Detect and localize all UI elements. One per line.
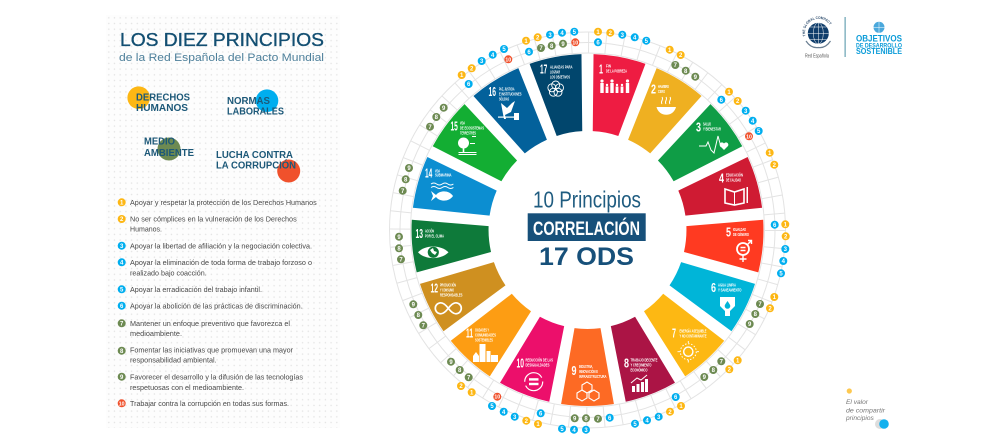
ods 11: CIUDADES Y [475, 328, 489, 332]
icon: book [725, 187, 748, 205]
dots: ods 3 principles: 1 [727, 90, 731, 96]
dots: ods 13 principles: 8 [397, 246, 401, 252]
logo: global compact: Red Española [805, 54, 829, 60]
dots: ods 9 principles [558, 414, 614, 434]
dots: ods 17 principles: 8 [550, 44, 554, 50]
ods 3: Y BIENESTAR [703, 126, 721, 132]
category: normas laborales [227, 89, 284, 118]
category: lucha contra la corrupcion: LA CORRUPCIÓN [216, 159, 296, 172]
ods 4 [675, 156, 764, 229]
dots: ods 7 principles: 2 [728, 367, 732, 373]
dots: ods 11 principles: 9 [449, 360, 453, 366]
dots: ods 12 principles [409, 300, 427, 329]
list: ten principles [118, 198, 317, 408]
dots: ods 5 principles: 5 [779, 271, 783, 277]
list: ten principles: No ser cómplices en la vulneración de los Derechos [130, 215, 297, 224]
dots: ods 9 principles: 9 [573, 416, 577, 422]
dots: ods 5 principles: 2 [784, 234, 788, 240]
dots: ods 17 principles: 3 [548, 33, 552, 39]
ods 15: DE ECOSISTEMAS [460, 126, 484, 130]
ods 11: COMUNIDADES [475, 332, 496, 338]
dots: ods 15 principles: 9 [442, 106, 446, 112]
ods 8: 8 [624, 356, 629, 370]
dots: ods 11 principles: 8 [458, 368, 462, 374]
ods 13: POR EL CLIMA [425, 234, 444, 238]
dots: ods 12 principles: 7 [422, 323, 426, 329]
icon: partnership flower [548, 81, 564, 96]
ods 5 [683, 213, 765, 273]
dots: ods 17 principles: 5 [573, 30, 577, 36]
dots: ods 17 principles: 10 [572, 40, 578, 46]
dots: ods 1 principles: 4 [633, 35, 637, 41]
ods 17: LOS OBJETIVOS [550, 74, 570, 80]
icon: cubes [577, 382, 599, 401]
ods 8 [598, 312, 676, 404]
dots: ods 3 principles: 2 [736, 99, 740, 105]
dots: ods 6 principles: 7 [758, 302, 762, 308]
dots: ods 14 principles [399, 164, 413, 195]
ods 13 [410, 213, 492, 273]
dots: ods 6 principles: 1 [773, 295, 777, 301]
list: ten principles: 3 [120, 244, 124, 250]
heading: panel title: LOS DIEZ PRINCIPIOS [120, 29, 324, 50]
dots: ods 3 principles: 4 [751, 119, 755, 125]
category: derechos humanos [127, 86, 190, 114]
dots: ods 12 principles: 8 [417, 313, 421, 319]
dots: ods 8 principles: 1 [679, 404, 683, 410]
dots: ods 16 principles: 10 [505, 57, 511, 63]
dots: ods 9 principles: 7 [596, 417, 600, 423]
dots: ods 9 principles: 3 [584, 428, 588, 434]
dots: ods 1 principles: 1 [596, 30, 600, 36]
footer note: el valor de compartir principios: El valor [846, 399, 869, 406]
ods 16: 16 [488, 85, 496, 99]
dots: ods 17 principles: 7 [539, 46, 543, 52]
dots: ods 13 principles: 7 [399, 257, 403, 263]
list: ten principles: 8 [120, 349, 124, 355]
dots: ods 7 principles: 7 [720, 359, 724, 365]
ods 10: 10 [516, 356, 524, 370]
dots: ods 3 principles: 3 [744, 109, 748, 115]
icon: infinity [435, 303, 461, 314]
ods 16: PAZ, JUSTICIA [499, 86, 514, 92]
ods 9 [561, 328, 614, 406]
logo: global compact [802, 16, 832, 60]
ods 6: AGUA LIMPIA [718, 282, 736, 288]
dots: ods 1 principles: 6 [596, 40, 600, 46]
category: medio ambiente: AMBIENTE [144, 147, 194, 159]
icon: heartbeat [699, 136, 728, 153]
icon: gender equality [737, 240, 752, 262]
ods 12: 12 [430, 282, 438, 296]
ods 15 [431, 103, 525, 192]
dots: ods 2 principles [666, 46, 699, 81]
dots: ods 11 principles: 1 [470, 390, 474, 396]
list: ten principles: Apoyar la libertad de afiliación y la negociación colectiva. [130, 241, 312, 250]
logo: objetivos de desarrollo sostenible: DE DESARROLLO [856, 43, 902, 50]
dots: ods 14 principles: 7 [401, 189, 405, 195]
dots: ods 16 principles: 1 [460, 73, 464, 79]
ods 16: E INSTITUCIONES [499, 92, 522, 96]
dots: ods 6 principles: 2 [768, 306, 772, 312]
dots: ods 3 principles: 6 [720, 98, 724, 104]
ods 10 [499, 312, 577, 404]
dots: ods 10 principles: 4 [502, 410, 506, 416]
ods 9: 9 [572, 364, 577, 378]
dots: ods 17 principles: 1 [524, 39, 528, 45]
list: ten principles: 7 [120, 321, 124, 327]
dots: ods 10 principles: 6 [539, 411, 543, 417]
ods 3: 3 [696, 120, 701, 134]
dots: ods 10 principles: 1 [536, 422, 540, 428]
icon: dove and gavel [498, 101, 519, 120]
list: ten principles: Mantener un enfoque preventivo que favorezca el [130, 319, 290, 328]
dots: ods 10 principles: 5 [490, 404, 494, 410]
dots: ods 16 principles: 5 [502, 47, 506, 53]
ods 4: 4 [719, 172, 724, 186]
center title [528, 187, 646, 271]
list: ten principles: Apoyar la eliminación de toda forma de trabajo forzoso o [130, 258, 312, 267]
list: ten principles: responsabilidad ambiental. [130, 356, 217, 365]
ods 17: LOGRAR [550, 70, 560, 74]
ods 15: 15 [450, 120, 458, 134]
footer note: el valor de compartir principios: principios [845, 415, 875, 422]
dots: ods 16 principles: 2 [470, 66, 474, 72]
icon: tree [458, 136, 476, 155]
list: ten principles: Humanos. [130, 225, 162, 234]
text: 10 principios: 10 Principios [533, 187, 641, 213]
dots: ods 1 principles: 5 [645, 39, 649, 45]
list: ten principles: Trabajar contra la corrupción en todas sus formas. [130, 399, 289, 408]
ods 12: Y CONSUMO [440, 288, 454, 292]
ods 2: CERO [658, 89, 665, 94]
dots: ods 13 principles [395, 233, 405, 263]
icon: sun [678, 341, 699, 362]
dots: ods 10 principles [488, 393, 545, 428]
dots: ods 17 principles: 2 [536, 35, 540, 41]
ods 13: 13 [416, 227, 423, 241]
ods 12: RESPONSABLES [440, 292, 463, 298]
icon: growth chart [631, 375, 648, 392]
logo: objetivos de desarrollo sostenible [856, 22, 903, 56]
ods 2: 2 [651, 82, 656, 96]
dots: ods 10 principles: 2 [525, 419, 529, 425]
list: ten principles: realizado bajo coacción. [130, 268, 207, 277]
footer note: el valor de compartir principios: de compartir [846, 407, 886, 414]
ods 11 [449, 285, 541, 378]
dots: ods 17 principles: 4 [560, 31, 564, 37]
ods 17: ALIANZAS PARA [550, 64, 572, 70]
dots: ods 9 principles: 5 [560, 427, 564, 433]
list: ten principles: 4 [120, 260, 124, 266]
dots: ods 4 principles: 1 [768, 151, 772, 157]
category: lucha contra la corrupcion [216, 149, 300, 182]
list: ten principles: Apoyar y respetar la protección de los Derechos Humanos [130, 198, 317, 207]
dots: ods 5 principles [771, 220, 790, 277]
ods 3 [650, 103, 744, 192]
logo: global compact: THE GLOBAL COMPACT [802, 16, 832, 37]
list: ten principles: 2 [120, 217, 124, 223]
dots: ods 15 principles: 7 [428, 125, 432, 131]
dots: ods 7 principles: 1 [736, 358, 740, 364]
list: ten principles: 6 [120, 304, 124, 310]
dots: ods 2 principles: 9 [694, 75, 698, 81]
dots: ods 5 principles: 1 [784, 222, 788, 228]
dots: ods 8 principles: 3 [657, 415, 661, 421]
dots: ods 9 principles: 4 [572, 428, 576, 434]
dots: ods 6 principles: 9 [748, 322, 752, 328]
icon: reduced inequalities [525, 373, 543, 391]
dots: ods 7 principles [700, 356, 742, 381]
dots: ods 15 principles [426, 104, 448, 131]
ods 16 [472, 66, 558, 160]
dots: ods 6 principles: 8 [754, 312, 758, 318]
ods 5: IGUALDAD [733, 227, 746, 232]
icon: water [720, 297, 735, 316]
ods 11: SOSTENIBLES [475, 338, 493, 342]
dots: ods 10 principles: 3 [513, 415, 517, 421]
category: medio ambiente [144, 135, 194, 160]
dots: ods 3 principles: 5 [757, 129, 761, 135]
dots: ods 7 principles: 9 [703, 375, 707, 381]
dots: ods 13 principles: 9 [397, 235, 401, 241]
dots: ods 16 principles: 6 [467, 82, 471, 88]
dots: ods 9 principles: 6 [608, 416, 612, 422]
ods 14: VIDA [435, 168, 440, 174]
text: 17 ods: 17 ODS [539, 243, 634, 271]
panel: los diez principios [106, 15, 340, 428]
dots: ods 8 principles: 6 [674, 395, 678, 401]
subheading: de la Red Española del Pacto Mundial [119, 52, 324, 64]
ods 7: Y NO CONTAMINANTE [680, 334, 707, 338]
footer note: el valor de compartir principios [845, 388, 889, 429]
ods 16: SÓLIDAS [499, 96, 509, 102]
dots: ods 5 principles: 4 [782, 259, 786, 265]
dots: ods 17 principles: 6 [527, 50, 531, 56]
list: ten principles: 9 [120, 375, 124, 381]
dots: ods 2 principles: 8 [684, 69, 688, 75]
dots: ods 3 principles: 10 [746, 134, 752, 140]
ods 7: 7 [672, 326, 676, 340]
dots: ods 9 principles: 8 [584, 416, 588, 422]
dots: ods 1 principles: 3 [621, 33, 625, 39]
ods 13: ACCIÓN [425, 228, 434, 234]
dots: ods 2 principles: 1 [668, 48, 672, 54]
list: ten principles: 1 [120, 200, 124, 206]
list: ten principles: Apoyar la abolición de las prácticas de discriminación. [130, 301, 303, 310]
dots: ods 5 principles: 6 [773, 223, 777, 229]
ods 5: DE GÉNERO [733, 232, 749, 237]
list: ten principles: medioambiente. [130, 329, 182, 338]
dots: ods 10 principles: 10 [494, 395, 500, 401]
icon: city [473, 344, 498, 362]
ods 3: SALUD [703, 122, 711, 126]
dots: ods 1 principles [594, 28, 650, 46]
ods 1: FIN [606, 64, 611, 68]
chart grid: outer ring [390, 32, 786, 428]
dots: ods 8 principles: 2 [668, 410, 672, 416]
ods 7: ENERGÍA ASEQUIBLE [680, 328, 707, 334]
dots: ods 17 principles: 9 [561, 42, 565, 48]
ods 9: INDUSTRIA, [579, 364, 593, 369]
ods 14: 14 [425, 166, 432, 180]
dots: ods 16 principles [458, 45, 512, 88]
ods 2 [617, 66, 703, 160]
dots: ods 3 principles [717, 88, 763, 140]
icon: family [600, 79, 629, 93]
ods 1 [580, 52, 646, 138]
dots: ods 8 principles: 5 [633, 422, 637, 428]
list: ten principles: respetuosas con el medioambiente. [130, 383, 244, 392]
icon: bowl [656, 97, 676, 115]
ods 4: EDUCACIÓN [726, 172, 743, 178]
dots: ods 6 principles [746, 293, 778, 328]
ods 14 [411, 156, 500, 229]
ods 10: REDUCCIÓN DE LAS [526, 358, 553, 362]
ods 12: PRODUCCIÓN [440, 282, 456, 288]
ods 2: HAMBRE [658, 84, 669, 89]
dots: ods 11 principles: 7 [467, 375, 471, 381]
dots: ods 14 principles: 9 [407, 166, 411, 172]
dots: ods 11 principles [447, 358, 476, 396]
ods 6: Y SANEAMIENTO [718, 288, 742, 292]
category: normas laborales: LABORALES [227, 106, 284, 118]
dots: ods 16 principles: 3 [480, 59, 484, 65]
ods 15: VIDA [460, 120, 465, 126]
ods 1: 1 [599, 62, 603, 76]
ods 8: ECONÓMICO [630, 368, 648, 372]
ods 4: DE CALIDAD [726, 178, 741, 182]
dots: ods 1 principles: 2 [609, 31, 613, 37]
dots: ods 16 principles: 4 [491, 53, 495, 59]
category: lucha contra la corrupcion: LUCHA CONTRA [216, 149, 293, 161]
category: medio ambiente: MEDIO [144, 135, 175, 147]
dots: ods 15 principles: 8 [435, 115, 439, 121]
ods 12 [418, 250, 511, 332]
ods 11: 11 [466, 326, 473, 340]
dots: ods 14 principles: 8 [404, 177, 408, 183]
category: normas laborales: NORMAS [227, 95, 270, 107]
icon: fish and waves [431, 183, 453, 201]
dots: ods 17 principles [522, 28, 579, 56]
ods 10: DESIGUALDADES [526, 362, 550, 368]
ods 6 [664, 250, 757, 332]
ods 14: SUBMARINA [435, 173, 452, 178]
ods 17 [529, 52, 595, 138]
dots: ods 2 principles: 7 [674, 63, 678, 69]
ods 1: DE LA POBREZA [606, 68, 627, 74]
ods 8: Y CRECIMIENTO [630, 362, 652, 368]
dots: ods 8 principles: 4 [645, 418, 649, 424]
logo: objetivos de desarrollo sostenible: OBJETIVOS [856, 34, 902, 44]
list: ten principles: Favorecer el desarrollo y la difusión de las tecnologías [130, 373, 303, 382]
category: derechos humanos: DERECHOS [136, 92, 190, 104]
list: ten principles: 10 [119, 401, 125, 407]
dots: ods 2 principles: 2 [679, 53, 683, 59]
category: derechos humanos: HUMANOS [136, 102, 188, 114]
dots: ods 12 principles: 9 [412, 302, 416, 308]
ods 9: INNOVACIÓN E [579, 369, 598, 374]
ods 5: 5 [726, 226, 731, 240]
ods 6: 6 [711, 281, 716, 295]
dots: ods 5 principles: 3 [784, 247, 788, 253]
list: ten principles: 5 [120, 287, 124, 293]
dots: ods 11 principles: 2 [459, 384, 463, 390]
list: ten principles: Fomentar las iniciativas que promuevan una mayor [130, 346, 293, 355]
ods 15: TERRESTRES [460, 130, 476, 136]
dots: ods 7 principles: 8 [712, 368, 716, 374]
dots: ods 8 principles [631, 393, 685, 428]
divider: logos [845, 17, 846, 57]
dots: ods 4 principles: 2 [773, 163, 777, 169]
ods 17: 17 [540, 62, 547, 76]
ods 7 [634, 285, 726, 378]
ods 9: INFRAESTRUCTURA [579, 374, 606, 379]
logo: objetivos de desarrollo sostenible: SOSTENIBLE [856, 47, 903, 56]
icon: climate eye [418, 246, 448, 258]
banner: correlacion: CORRELACIÓN [533, 216, 640, 240]
dots: ods 4 principles [766, 149, 778, 169]
list: ten principles: Apoyar la erradicación del trabajo infantil. [130, 285, 262, 294]
ods 8: TRABAJO DECENTE [630, 358, 658, 362]
